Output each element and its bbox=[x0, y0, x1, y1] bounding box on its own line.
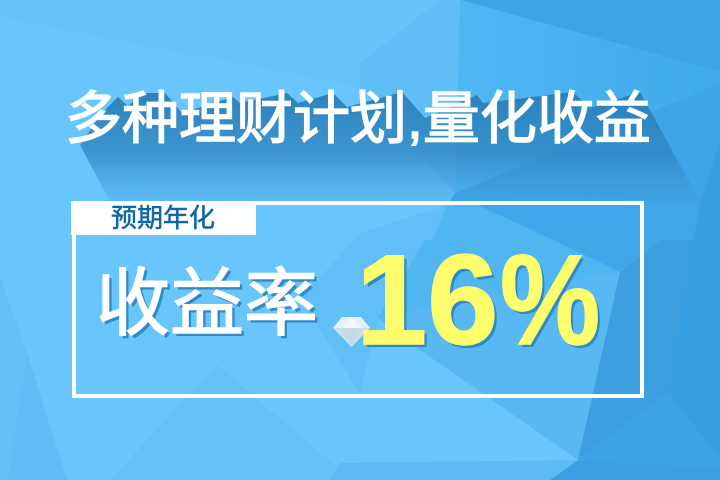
icon: diamond bbox=[333, 317, 370, 347]
tab text: 预期年化 bbox=[111, 203, 215, 233]
tab: expected annualized label bbox=[71, 201, 256, 235]
rate frame bbox=[72, 201, 644, 398]
rate value: 16 bbox=[356, 229, 498, 372]
rate value: % bbox=[500, 229, 601, 372]
rate value bbox=[356, 229, 601, 372]
rate label: 收益率 bbox=[96, 262, 318, 345]
title: 多种理财计划,量化收益 bbox=[65, 87, 651, 151]
